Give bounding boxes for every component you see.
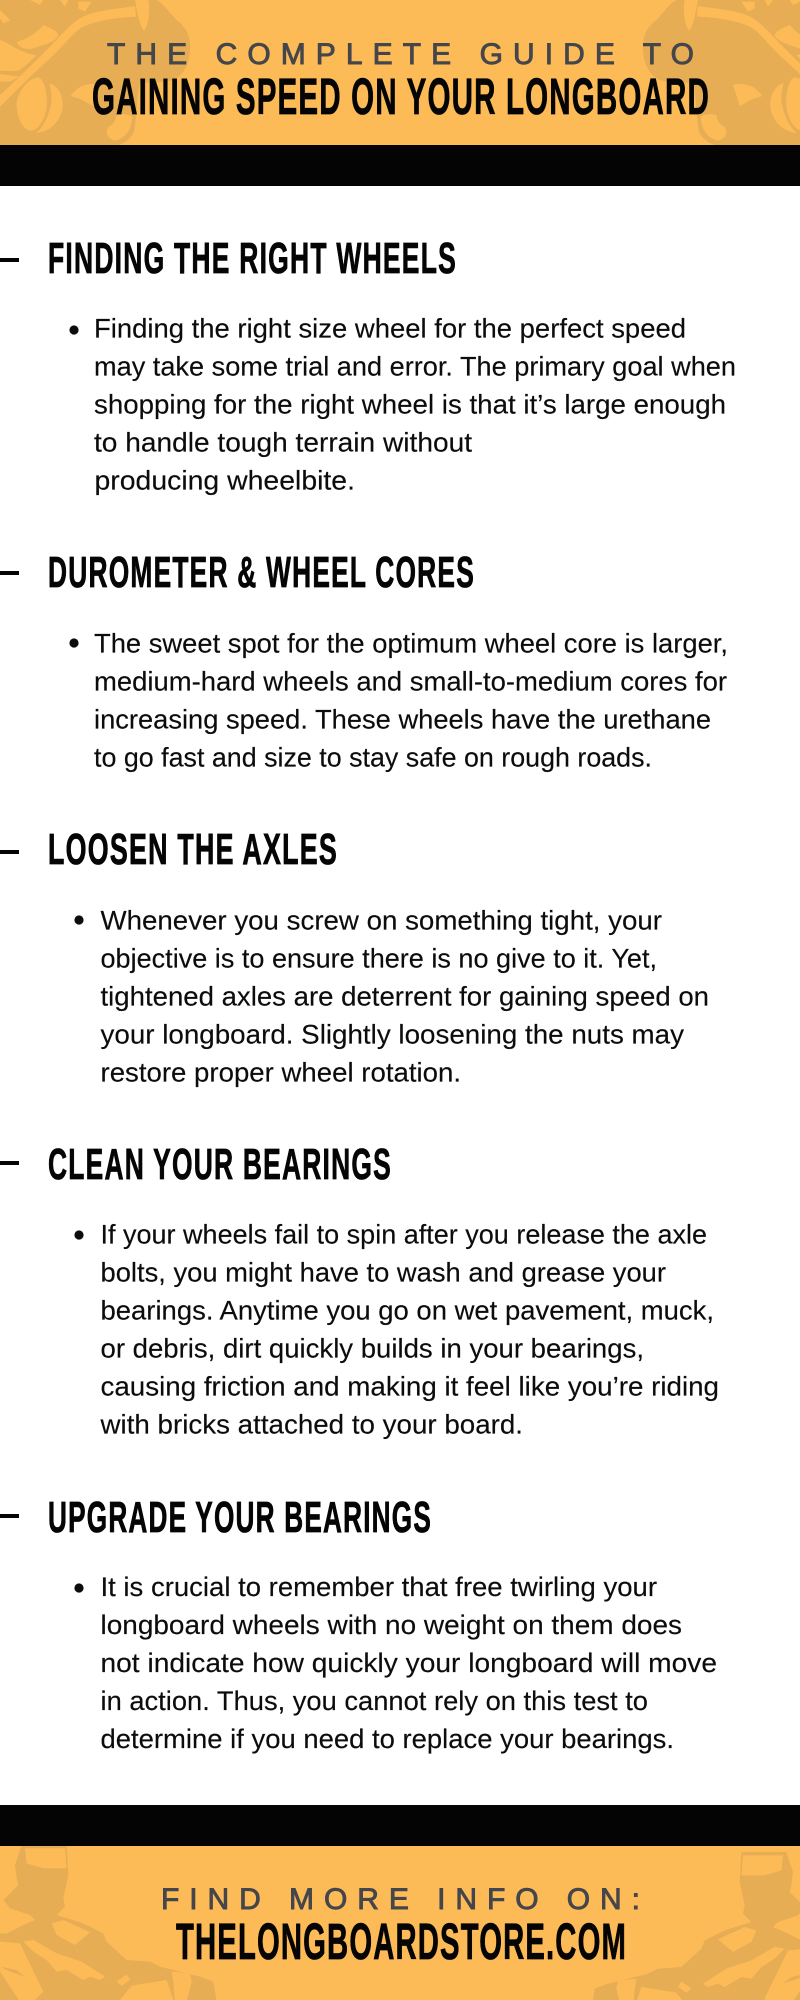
body text [100, 1572, 717, 1754]
body text: causing friction and making it feel like you’re riding [100, 1371, 719, 1401]
body text: medium-hard wheels and small-to-medium cores for [94, 667, 727, 697]
body text: Finding the right size wheel for the perfect speed [94, 313, 686, 343]
section: upgrade your bearings [0, 1494, 717, 1754]
bullet [74, 1230, 84, 1240]
body text [94, 629, 728, 773]
heading: DUROMETER & WHEEL CORES [48, 549, 475, 597]
body text: tightened axles are deterrent for gaining speed on [100, 981, 709, 1011]
body text: objective is to ensure there is no give to it. Yet, [100, 943, 657, 973]
body text: to handle tough terrain without [94, 427, 473, 457]
dash marker [0, 1514, 19, 1518]
footer black band [0, 1805, 800, 1846]
body text: bolts, you might have to wash and grease your [100, 1257, 666, 1287]
body text: or debris, dirt quickly builds in your bearings, [100, 1333, 644, 1363]
decorative skater silhouette right [591, 1852, 800, 2000]
body text: It is crucial to remember that free twirling your [100, 1572, 657, 1602]
body text: your longboard. Slightly loosening the nuts may [100, 1019, 685, 1049]
heading: UPGRADE YOUR BEARINGS [48, 1494, 432, 1542]
body text [94, 313, 736, 495]
body text: Whenever you screw on something tight, your [100, 905, 662, 935]
body text: restore proper wheel rotation. [100, 1057, 461, 1087]
bullet [74, 915, 84, 925]
decorative skater silhouette left [0, 0, 190, 147]
body text: producing wheelbite. [94, 465, 355, 495]
bullet [69, 638, 79, 648]
heading: LOOSEN THE AXLES [48, 826, 338, 874]
decorative skater silhouette left [0, 1845, 217, 2000]
dash marker [0, 1161, 19, 1165]
footer label: FIND MORE INFO ON: [161, 1883, 640, 1916]
heading: FINDING THE RIGHT WHEELS [48, 235, 457, 283]
body text [100, 905, 709, 1087]
header background [0, 0, 800, 145]
body text: not indicate how quickly your longboard will move [100, 1648, 717, 1678]
section: finding the right wheels [0, 235, 736, 495]
header black band [0, 145, 800, 186]
body text: may take some trial and error. The primary goal when [94, 351, 736, 381]
bullet [69, 325, 79, 335]
section: durometer and wheel cores [0, 549, 728, 773]
header subtitle: THE COMPLETE GUIDE TO [107, 38, 694, 71]
panel: footer [0, 1805, 800, 2000]
section: clean your bearings [0, 1141, 719, 1439]
body text: in action. Thus, you cannot rely on this test to [100, 1686, 648, 1716]
dash marker [0, 571, 19, 575]
heading: CLEAN YOUR BEARINGS [48, 1141, 392, 1189]
dash marker [0, 850, 19, 854]
body text: determine if you need to replace your bearings. [100, 1724, 674, 1754]
bullet [74, 1583, 84, 1593]
body text: increasing speed. These wheels have the urethane [94, 705, 711, 735]
body text: to go fast and size to stay safe on rough roads. [94, 743, 652, 773]
section: loosen the axles [0, 826, 709, 1087]
body text: The sweet spot for the optimum wheel core is larger, [94, 629, 728, 659]
panel: header [0, 0, 800, 186]
body text: If your wheels fail to spin after you release the axle [100, 1219, 707, 1249]
footer background [0, 1846, 800, 2000]
body text: shopping for the right wheel is that it’s large enough [94, 389, 726, 419]
decorative skater silhouette right [643, 0, 800, 147]
body text: with bricks attached to your board. [99, 1409, 523, 1439]
body text: longboard wheels with no weight on them does [100, 1610, 682, 1640]
body text: bearings. Anytime you go on wet pavement, muck, [100, 1295, 714, 1325]
dash marker [0, 258, 19, 262]
body text [99, 1219, 719, 1439]
